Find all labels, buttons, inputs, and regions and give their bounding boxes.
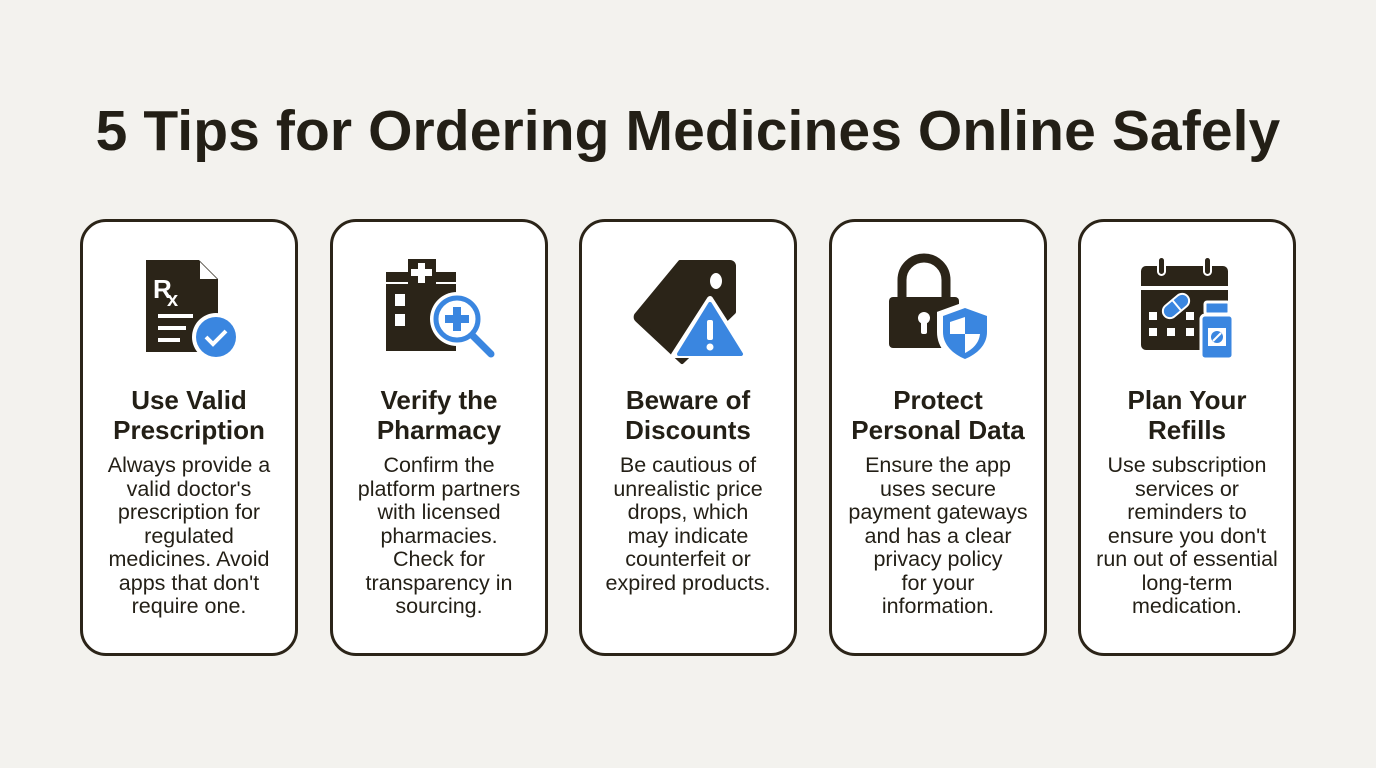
- icon: price tag with warning: [634, 260, 744, 364]
- text: Use subscription: [1108, 453, 1266, 477]
- text: apps that don't: [119, 570, 259, 594]
- panel: prescription: [80, 219, 298, 656]
- text: Ensure the app: [865, 453, 1011, 477]
- text: reminders to: [1127, 500, 1247, 524]
- text: [1096, 453, 1278, 618]
- title: 5 Tips for Ordering Medicines Online Safely: [96, 99, 1280, 163]
- icon: calendar with pill and bottle: [1141, 258, 1232, 358]
- heading: Prescription: [113, 415, 265, 445]
- text: [358, 453, 520, 618]
- panel: discounts: [579, 219, 797, 656]
- heading: Plan Your: [1128, 385, 1246, 415]
- text: expired products.: [606, 570, 770, 594]
- heading: [113, 385, 265, 445]
- text: sourcing.: [395, 594, 483, 618]
- heading: Discounts: [625, 415, 751, 445]
- heading: Beware of: [626, 385, 750, 415]
- text: platform partners: [358, 476, 520, 500]
- heading: [377, 385, 501, 445]
- text: long-term: [1142, 570, 1232, 594]
- text: Check for: [393, 547, 485, 571]
- text: may indicate: [628, 524, 748, 548]
- text: ensure you don't: [1108, 524, 1266, 548]
- panel: data: [829, 219, 1047, 656]
- text: privacy policy: [873, 547, 1003, 571]
- heading: Personal Data: [851, 415, 1025, 445]
- icon: prescription document with check: R: [153, 274, 172, 304]
- icon: pharmacy building with magnifier: [386, 259, 494, 358]
- text: payment gateways: [848, 500, 1028, 524]
- text: information.: [882, 594, 994, 618]
- text: medication.: [1132, 594, 1242, 618]
- heading: Protect: [893, 385, 983, 415]
- heading: Pharmacy: [377, 415, 501, 445]
- text: Confirm the: [383, 453, 495, 477]
- text: prescription for: [118, 500, 260, 524]
- panel: pharmacy: [330, 219, 548, 656]
- heading: [1128, 385, 1246, 445]
- text: counterfeit or: [625, 547, 751, 571]
- text: Always provide a: [108, 453, 270, 477]
- text: [606, 453, 770, 594]
- text: [848, 453, 1028, 618]
- heading: Verify the: [380, 385, 498, 415]
- text: regulated: [144, 524, 234, 548]
- heading: [625, 385, 751, 445]
- text: for your: [902, 570, 974, 594]
- text: and has a clear: [864, 524, 1012, 548]
- panel: refills: [1078, 219, 1296, 656]
- icon: padlock with shield: [889, 254, 987, 359]
- text: require one.: [132, 594, 246, 618]
- text: [108, 453, 270, 618]
- text: with licensed: [377, 500, 501, 524]
- text: services or: [1135, 476, 1239, 500]
- text: valid doctor's: [127, 476, 251, 500]
- text: medicines. Avoid: [109, 547, 269, 571]
- icon: prescription document with check: x: [167, 289, 178, 311]
- text: uses secure: [880, 476, 996, 500]
- text: Be cautious of: [620, 453, 756, 477]
- icon: prescription document with check: [146, 260, 236, 357]
- text: drops, which: [628, 500, 748, 524]
- text: unrealistic price: [613, 476, 763, 500]
- heading: Use Valid: [131, 385, 247, 415]
- heading: [851, 385, 1025, 445]
- heading: Refills: [1148, 415, 1226, 445]
- text: transparency in: [366, 570, 512, 594]
- text: pharmacies.: [380, 524, 498, 548]
- text: run out of essential: [1096, 547, 1278, 571]
